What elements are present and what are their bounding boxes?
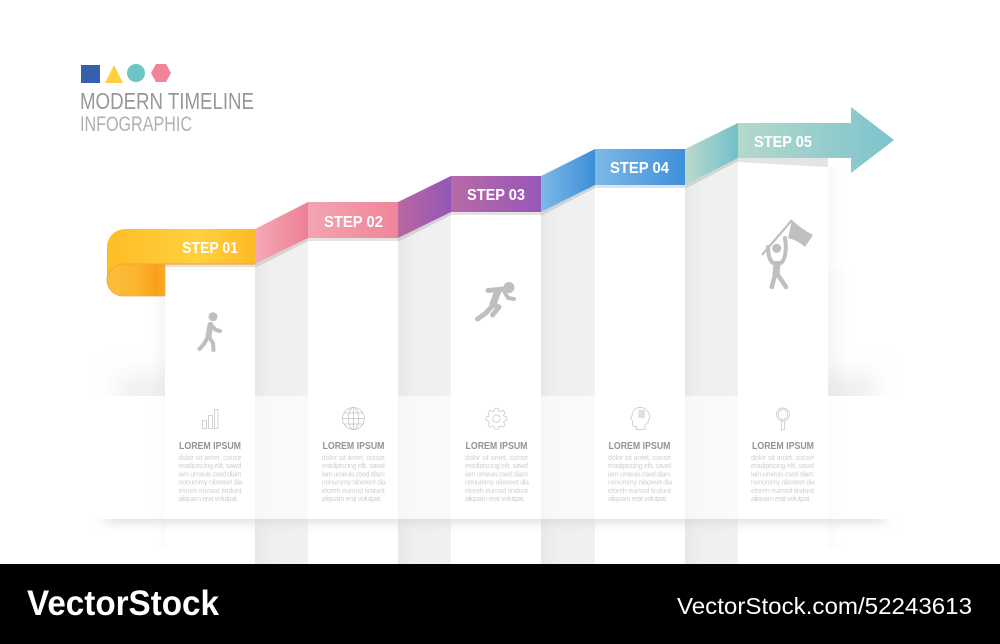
column 4: [608, 408, 672, 503]
title: MODERN TIMELINE: [80, 88, 254, 114]
step 3 band: [451, 176, 541, 212]
icon: bar chart: [202, 410, 218, 428]
body text: [178, 455, 243, 503]
body text: nonummy niboreet dia: [322, 480, 386, 487]
body text: iam umeuis csed diam: [322, 471, 385, 478]
heading: LOREM IPSUM: [179, 441, 241, 452]
step 2 band: [308, 202, 398, 238]
heading: LOREM IPSUM: [322, 441, 384, 452]
footer logo: VectorStock: [27, 584, 220, 623]
body text: eradipiscing elit, sawd: [608, 463, 671, 470]
heading: LOREM IPSUM: [466, 441, 528, 452]
band shadows: [165, 158, 828, 268]
white columns: [165, 158, 828, 564]
body text: eloreh eumod tindunt: [465, 488, 528, 495]
icon: gear: [486, 408, 507, 429]
footer bar: [0, 564, 1000, 644]
body text: eloreh eumod tindunt: [322, 488, 385, 495]
body text: eradipiscing elit, sawd: [465, 463, 528, 470]
body text: eloreh eumod tindunt: [178, 488, 242, 495]
body text: nonummy niboreet dia: [465, 480, 529, 487]
body text: dolor sit amet, conse: [751, 455, 814, 462]
body text: dolor sit amet, conse: [608, 455, 671, 462]
body text: [608, 455, 672, 503]
connector 1-2: [255, 202, 308, 264]
faint column edges below band: [157, 519, 842, 549]
icon: magnifier: [776, 408, 790, 430]
column 1: [178, 410, 243, 503]
icon: walking person: [200, 312, 220, 350]
upper right column edge fade: [828, 167, 846, 270]
body text: nonummy niboreet dia: [608, 480, 672, 487]
column 3: [465, 408, 529, 503]
body text: eradipiscing elit, sawd: [178, 463, 242, 470]
column 2: [322, 408, 386, 503]
body text: eloreh eumod tindunt: [608, 488, 671, 495]
body text: dolor sit amet, conse: [322, 455, 385, 462]
body text: iam umeuis csed diam: [608, 471, 671, 478]
icon: person with flag: [762, 220, 813, 287]
icon: head with chart: [630, 408, 650, 430]
body text: aliquam erat volutpat.: [751, 496, 811, 503]
heading: LOREM IPSUM: [608, 441, 670, 452]
body text: aliquam erat volutpat.: [465, 496, 525, 503]
gray connector columns: [255, 158, 738, 564]
body text: aliquam erat volutpat.: [322, 496, 382, 503]
square icon: [81, 65, 100, 83]
band drop shadow: [103, 519, 887, 526]
body text: iam umeuis csed diam: [751, 471, 814, 478]
body text: eradipiscing elit, sawd: [322, 463, 385, 470]
connector 4-5: [685, 123, 738, 185]
heading: LOREM IPSUM: [752, 441, 814, 452]
body text: iam umeuis csed diam: [178, 471, 242, 478]
step 1 ribbon: [107, 229, 255, 296]
body text: iam umeuis csed diam: [465, 471, 528, 478]
body text: dolor sit amet, conse: [465, 455, 528, 462]
body text: eradipiscing elit, sawd: [751, 463, 814, 470]
step 1 label: STEP 01: [182, 240, 238, 257]
body text: [465, 455, 529, 503]
body text: nonummy niboreet dia: [178, 480, 243, 487]
logo shapes: [81, 64, 171, 83]
footer url: VectorStock.com/52243613: [677, 593, 972, 619]
step 4 label: STEP 04: [610, 160, 669, 177]
step 3 label: STEP 03: [467, 187, 525, 204]
icon: globe: [342, 408, 364, 430]
icon: running person: [478, 282, 514, 319]
hexagon icon: [151, 64, 171, 82]
body text: dolor sit amet, conse: [178, 455, 242, 462]
step 4 band: [595, 149, 685, 185]
body text: aliquam erat volutpat.: [608, 496, 668, 503]
soft side shadows above the band: [120, 270, 874, 396]
step 5 label: STEP 05: [754, 134, 812, 151]
step 5 arrow: [738, 107, 894, 173]
connector 2-3: [398, 176, 451, 238]
column 5: [751, 408, 815, 503]
connector 3-4: [541, 149, 595, 212]
body text: [322, 455, 386, 503]
body text: eloreh eumod tindunt: [751, 488, 814, 495]
step 2 label: STEP 02: [324, 214, 383, 231]
subtitle: INFOGRAPHIC: [80, 112, 192, 136]
body text: [751, 455, 815, 503]
body text: aliquam erat volutpat.: [178, 496, 239, 503]
circle icon: [127, 64, 145, 82]
body text: nonummy niboreet dia: [751, 480, 815, 487]
triangle icon: [105, 65, 123, 83]
translucent info band: [145, 396, 848, 519]
